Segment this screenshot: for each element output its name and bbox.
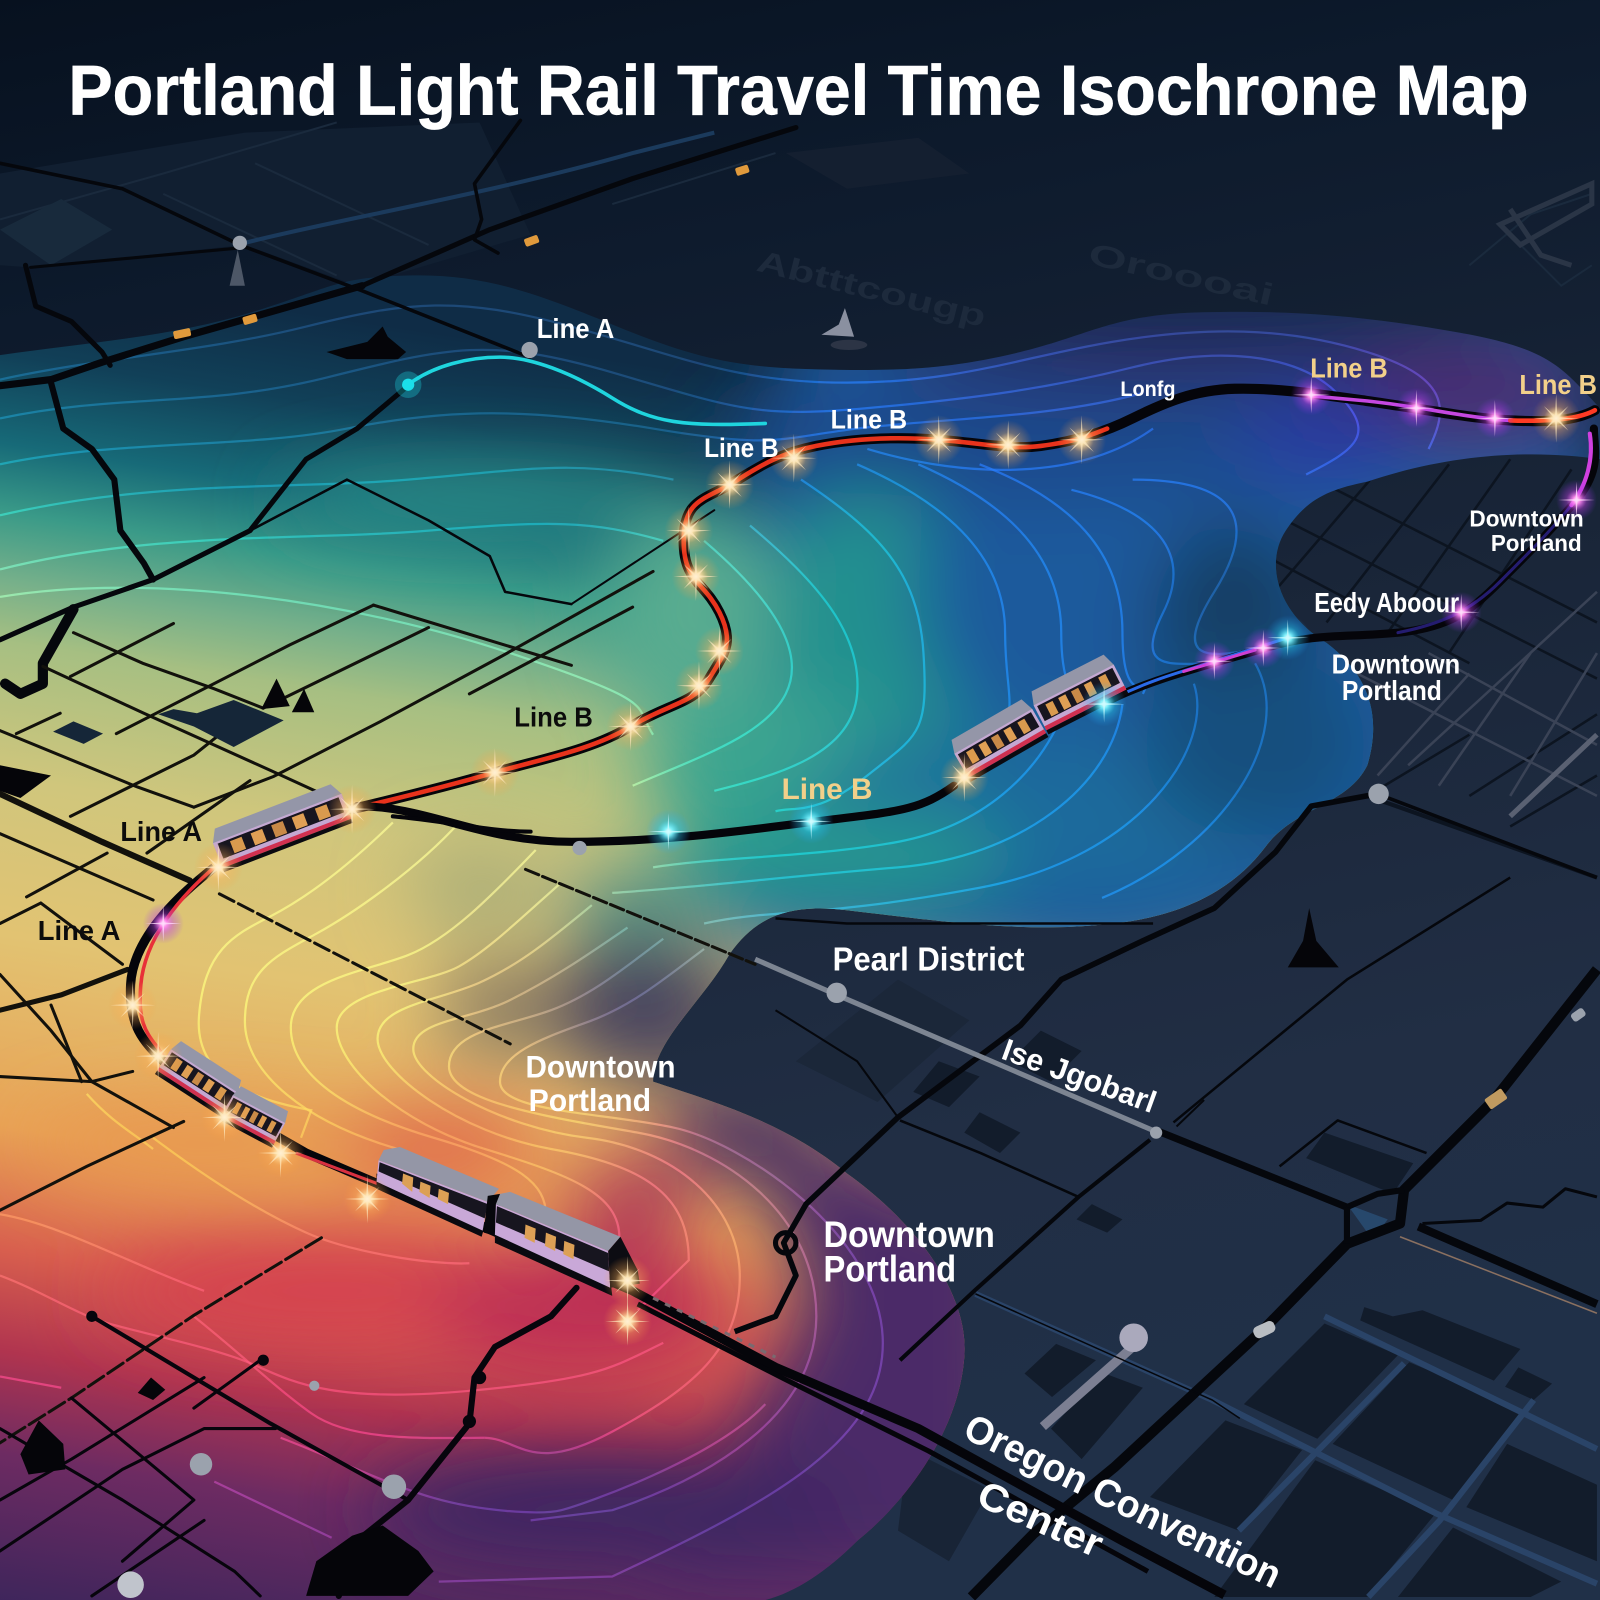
icon: sailboat [821,308,867,350]
silhouettes: trees and landmarks [0,327,1339,1596]
labels: Downtown [526,1049,676,1085]
labels: Line B [831,405,907,435]
labels: Downtown [1469,506,1584,532]
lower right city blocks [796,980,1597,1597]
isochrone contour lines [0,304,1441,1583]
isochrone map infographic: Line B [782,773,872,806]
rail: upper Line B [352,389,1595,809]
train car two [495,1192,640,1296]
road: Pearl District light street [755,959,1158,1133]
train: Line A north [194,782,353,892]
faint ghost place names [753,237,1277,334]
labels: Portland [1491,530,1582,556]
labels: Oregon Convention [957,1406,1288,1597]
right grid blocks [1265,459,1597,878]
train: Line B east [940,653,1128,802]
tower marker [230,250,245,286]
isochrone map infographic: Line B [1310,353,1388,384]
train car one [377,1147,499,1237]
station glows [108,374,1597,1346]
labels: Portland [823,1249,956,1290]
rail: Line A cyan branch [408,357,765,424]
train: Line A curve [155,1039,291,1148]
isochrone map infographic: Line B [514,702,593,733]
roads: yellow zone street grid [0,571,755,1443]
labels: Eedy Aboour [1314,587,1459,618]
isochrone map infographic: Line A [120,816,202,847]
building: dark block [53,700,284,747]
labels: Downtown [823,1214,995,1255]
labels: Line A [537,313,614,344]
rail: lower Line B and eastern line [357,429,1595,842]
train: Line A main [377,1147,652,1305]
labels: Pearl District [833,941,1024,978]
labels: Center [971,1473,1110,1566]
faint ghost place names: Oroooai [1085,237,1277,313]
faint street map: top and right [0,122,1592,286]
roads: upper left network [0,120,796,694]
faint ghost place names: Abtttcougp [753,244,989,334]
isochrone map infographic: Line A [38,915,121,946]
labels: Portland [529,1082,651,1118]
labels: Ise Jgobarl [998,1033,1161,1120]
labels: Portland [1342,675,1442,706]
rail: southern Line A track [130,867,1224,1595]
roads: lower right network [735,794,1597,1597]
labels: Lonfg [1120,377,1176,401]
labels [526,313,1584,1597]
roads: lower left network [0,1288,577,1596]
title: Portland Light Rail Travel Time Isochrone Map [68,50,1529,129]
labels: Line B [704,433,779,463]
labels: Downtown [1332,648,1460,679]
